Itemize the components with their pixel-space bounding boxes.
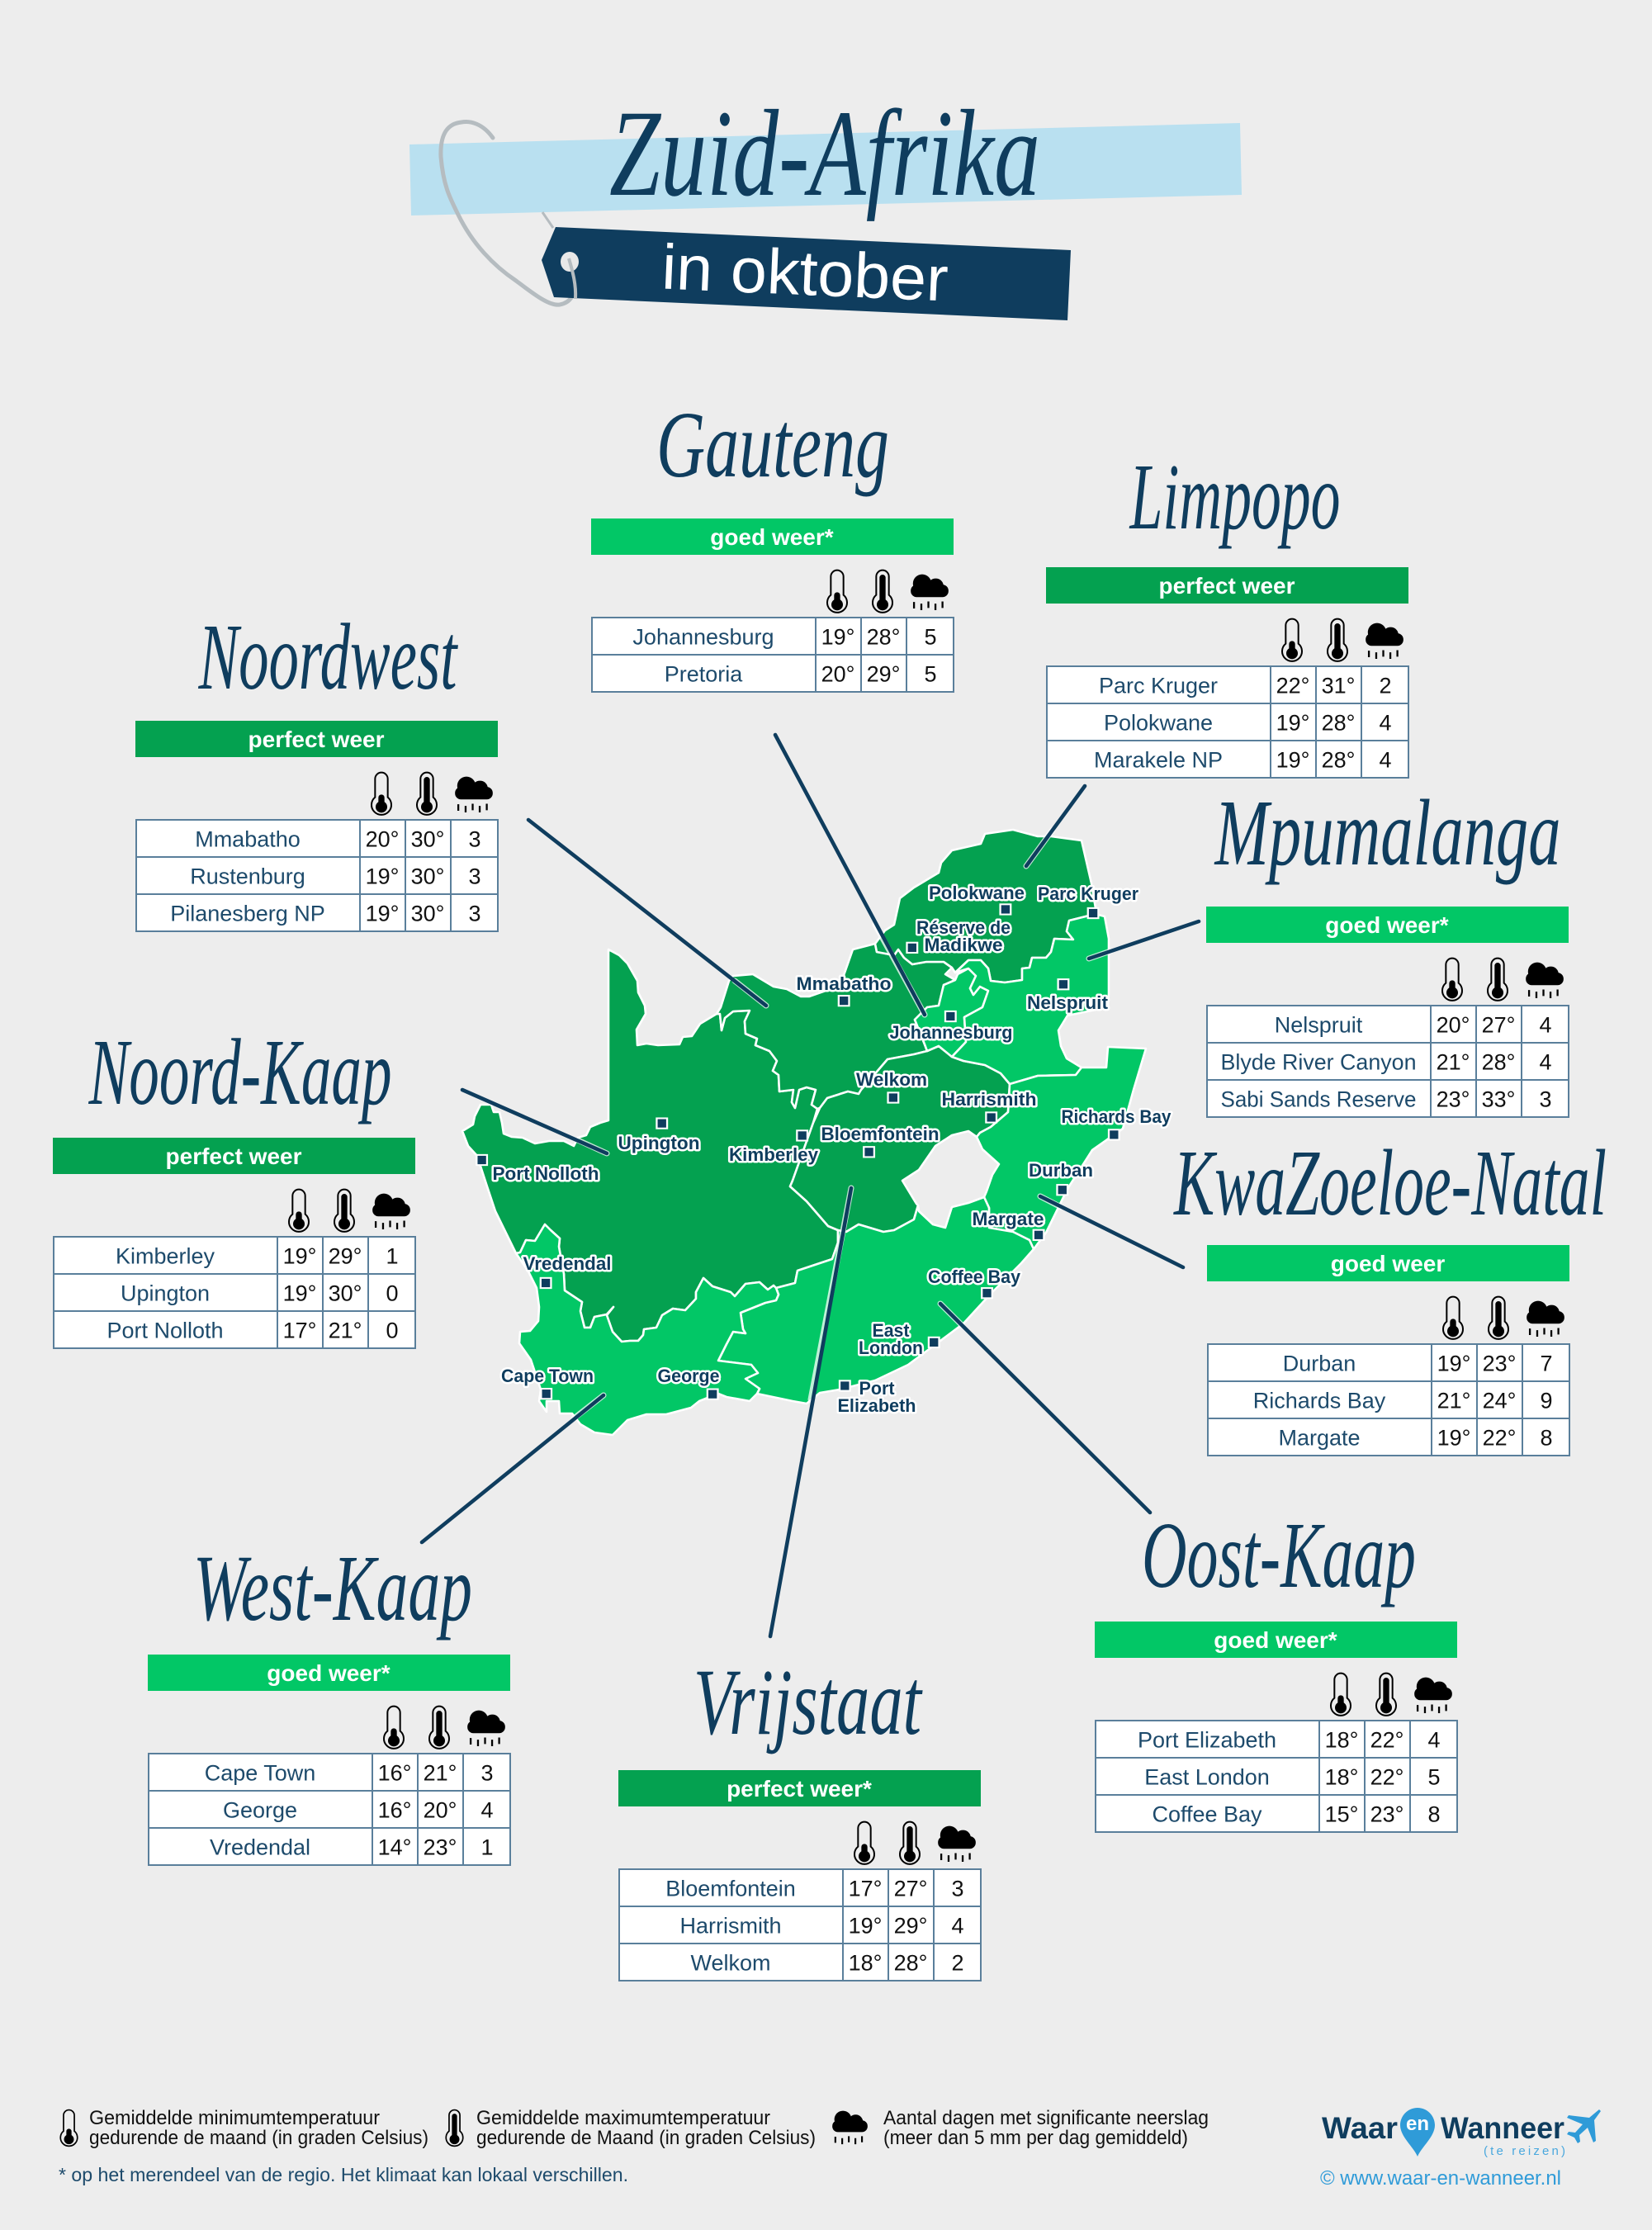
logo: Waar en Wanneer <box>1320 2108 1601 2190</box>
rating bar <box>135 721 498 757</box>
climate table: Johannesburg <box>632 624 774 649</box>
climate table: Richards Bay <box>1253 1389 1386 1413</box>
climate table: 3 <box>480 1760 494 1785</box>
logo word: en: en <box>1406 2113 1429 2135</box>
rating bar: goed weer* <box>267 1660 391 1686</box>
map labels: Welkom <box>856 1069 927 1090</box>
climate table: 33° <box>1482 1087 1515 1111</box>
rating bar <box>591 518 954 555</box>
map labels: Vredendal <box>523 1253 611 1274</box>
heading: Noord-Kaap: Noord-Kaap <box>88 1020 391 1124</box>
leader line: Limpopo <box>1026 786 1085 866</box>
climate table: 4 <box>951 1914 964 1939</box>
panel: Mpumalanga <box>1206 780 1569 1117</box>
climate table: 19° <box>1276 710 1309 735</box>
climate table: 29° <box>894 1914 927 1939</box>
climate table <box>1208 1344 1569 1456</box>
map labels <box>492 883 1172 1416</box>
logo tagline: (te reizen) <box>1484 2144 1565 2158</box>
climate table: 23° <box>1370 1802 1403 1826</box>
climate table: 20° <box>1437 1012 1470 1037</box>
map labels: Cape Town <box>501 1366 594 1386</box>
icon: minimum temperature <box>60 2110 78 2146</box>
heading: West-Kaap: West-Kaap <box>193 1536 472 1641</box>
logo word: Wanneer: Wanneer <box>1441 2111 1564 2145</box>
leader line: West-Kaap <box>422 1395 604 1542</box>
climate table: 5 <box>924 624 937 649</box>
climate table: Sabi Sands Reserve <box>1220 1087 1417 1111</box>
icons: temperature and rain <box>1282 619 1403 661</box>
legend text: maximum temperature: gedurende de Maand (in graden Celsius) <box>476 2127 816 2149</box>
climate table: Blyde River Canyon <box>1220 1050 1417 1075</box>
title block <box>409 85 1242 320</box>
rating bar: goed weer* <box>710 524 834 550</box>
climate table: 19° <box>366 902 399 926</box>
icons: temperature and rain <box>1443 1297 1564 1339</box>
heading: Vrijstaat: Vrijstaat <box>693 1650 923 1754</box>
province: Noord-Kaap <box>462 949 838 1342</box>
climate table: 31° <box>1322 674 1355 698</box>
rating bar <box>618 1770 981 1806</box>
map labels: Margate <box>973 1209 1044 1229</box>
climate table: 4 <box>1539 1012 1552 1037</box>
climate table: Harrismith <box>679 1914 782 1939</box>
map labels: Réserve de <box>916 917 1011 938</box>
legend text: rain: Aantal dagen met significante neerslag <box>883 2107 1209 2129</box>
icons: temperature and rain <box>289 1190 410 1232</box>
climate table: 5 <box>1427 1765 1441 1790</box>
tag string <box>441 122 575 305</box>
map labels: Harrismith <box>941 1089 1037 1110</box>
icons: temperature and rain <box>854 1822 976 1864</box>
climate table: 19° <box>283 1281 316 1306</box>
panel: Limpopo <box>1046 444 1408 778</box>
climate table: George <box>223 1798 297 1823</box>
climate table: 29° <box>329 1243 362 1268</box>
rating bar: perfect weer* <box>727 1776 872 1802</box>
climate table: 1 <box>480 1835 494 1859</box>
climate table: 4 <box>1427 1727 1441 1752</box>
rating bar <box>1206 907 1569 943</box>
climate table: 19° <box>821 624 854 649</box>
climate table: 28° <box>867 624 900 649</box>
climate table: 19° <box>1437 1351 1470 1375</box>
climate table: Port Elizabeth <box>1138 1727 1276 1752</box>
leader line: Vrijstaat <box>770 1188 851 1636</box>
map labels: Richards Bay <box>1062 1106 1172 1127</box>
climate table: 3 <box>468 827 481 852</box>
legend text: rain: (meer dan 5 mm per dag gemiddeld) <box>883 2127 1188 2149</box>
province: KwaZoeloe-Natal <box>977 1047 1146 1249</box>
leader line: Mpumalanga <box>1089 921 1199 959</box>
climate table: 23° <box>1483 1351 1516 1375</box>
climate table: 21° <box>424 1760 457 1785</box>
climate table: Welkom <box>690 1950 771 1975</box>
climate table: 27° <box>894 1876 927 1901</box>
climate table: 18° <box>849 1950 882 1975</box>
climate table: 0 <box>386 1318 399 1342</box>
title band <box>409 123 1242 215</box>
climate table: 24° <box>1483 1389 1516 1413</box>
logo url: © www.waar-en-wanneer.nl <box>1320 2167 1561 2190</box>
climate table: Port Nolloth <box>107 1318 224 1342</box>
logo pin <box>1400 2108 1435 2157</box>
climate table: 16° <box>378 1798 411 1823</box>
climate table <box>1047 666 1408 778</box>
panel: Vrijstaat <box>618 1650 981 1981</box>
climate table: 21° <box>329 1318 362 1342</box>
weather card: KwaZoeloe-Natal <box>1207 1245 1569 1456</box>
climate table: Coffee Bay <box>1152 1802 1262 1826</box>
icon: maximum temperature <box>446 2110 463 2146</box>
rating bar: goed weer* <box>1325 912 1449 938</box>
climate table: 27° <box>1482 1012 1515 1037</box>
province: Oost-Kaap <box>718 1197 1034 1404</box>
subtitle: in oktober <box>660 231 949 315</box>
climate table: 0 <box>386 1281 399 1306</box>
climate table: 20° <box>424 1798 457 1823</box>
climate table <box>1207 1006 1569 1117</box>
province: West-Kaap <box>516 1224 779 1435</box>
icons: temperature and rain <box>827 571 949 613</box>
climate table: Kimberley <box>116 1243 215 1268</box>
climate table: 8 <box>1540 1425 1553 1450</box>
climate table: 9 <box>1540 1389 1553 1413</box>
climate table: 17° <box>283 1318 316 1342</box>
climate table: Rustenburg <box>190 864 305 888</box>
climate table: 14° <box>378 1835 411 1859</box>
weather card: Noord-Kaap <box>53 1138 415 1348</box>
climate table: 19° <box>849 1914 882 1939</box>
map labels: Mmabatho <box>796 973 892 994</box>
rating bar <box>148 1655 510 1691</box>
heading: Limpopo: Limpopo <box>1129 444 1341 549</box>
climate table: 5 <box>924 662 937 687</box>
map labels: Madikwe <box>925 935 1002 955</box>
province: Gauteng <box>915 968 988 1057</box>
climate table: Cape Town <box>205 1760 315 1785</box>
map labels: Port <box>859 1378 895 1399</box>
climate table: 30° <box>329 1281 362 1306</box>
climate table: Nelspruit <box>1275 1012 1363 1037</box>
map labels: Coffee Bay <box>928 1267 1021 1287</box>
panel: Oost-Kaap <box>1095 1503 1457 1832</box>
climate table: Parc Kruger <box>1099 674 1218 698</box>
city markers <box>476 904 1119 1399</box>
icon: plane <box>1567 2109 1601 2143</box>
climate table <box>54 1237 415 1348</box>
panel: West-Kaap <box>148 1536 510 1865</box>
leader line: Noordwest <box>528 820 766 1006</box>
climate table: 23° <box>1437 1087 1470 1111</box>
climate table: Pilanesberg NP <box>170 902 325 926</box>
weather card: Noordwest <box>135 721 498 931</box>
rating bar <box>1046 567 1408 604</box>
climate table: Marakele NP <box>1094 748 1223 773</box>
climate table <box>136 820 498 931</box>
climate table: 20° <box>366 827 399 852</box>
climate table: 28° <box>1482 1050 1515 1075</box>
panel: Noordwest <box>135 604 498 931</box>
climate table: 19° <box>1437 1425 1470 1450</box>
map labels: Upington <box>618 1133 700 1153</box>
climate table: 28° <box>894 1950 927 1975</box>
climate table: Polokwane <box>1104 710 1213 735</box>
panel: Noord-Kaap <box>53 1020 415 1348</box>
map labels: Johannesburg <box>890 1022 1012 1043</box>
map labels: Durban <box>1029 1160 1093 1181</box>
map labels: Kimberley <box>729 1144 819 1165</box>
province: Vrijstaat <box>790 1046 1010 1232</box>
map labels: Polokwane <box>929 883 1025 903</box>
heading: Oost-Kaap: Oost-Kaap <box>1142 1503 1416 1607</box>
rating bar <box>1207 1245 1569 1281</box>
climate table <box>1096 1721 1457 1832</box>
string over tag <box>569 258 575 299</box>
climate table: 17° <box>849 1876 882 1901</box>
climate table: Upington <box>121 1281 210 1306</box>
climate table: 2 <box>951 1950 964 1975</box>
climate table: Vredendal <box>210 1835 310 1859</box>
climate table: 20° <box>821 662 854 687</box>
rating bar <box>1095 1622 1457 1658</box>
climate table <box>619 1869 981 1981</box>
leader line: Noord-Kaap <box>462 1090 607 1153</box>
climate table: 28° <box>1322 748 1355 773</box>
climate table: 1 <box>386 1243 399 1268</box>
climate table: 23° <box>424 1835 457 1859</box>
icon: rain <box>832 2111 868 2144</box>
legend text: minimum temperature: Gemiddelde minimumtemperatuur <box>89 2107 380 2129</box>
leader line: Oost-Kaap <box>940 1304 1150 1513</box>
tag hole <box>561 252 579 272</box>
footnote: * op het merendeel van de regio. Het klimaat kan lokaal verschillen. <box>59 2164 628 2185</box>
climate table: Pretoria <box>665 662 743 687</box>
map labels: Parc Kruger <box>1038 883 1138 904</box>
rating bar: perfect weer <box>249 727 385 752</box>
leader line: Gauteng <box>775 735 925 1015</box>
panel: Gauteng <box>591 392 954 692</box>
province: Mpumalanga <box>952 914 1109 1084</box>
heading: Gauteng: Gauteng <box>656 392 889 497</box>
map of South Africa <box>462 830 1146 1435</box>
climate table: 3 <box>468 902 481 926</box>
main title: Zuid-Afrika <box>609 85 1040 222</box>
climate table: 19° <box>283 1243 316 1268</box>
icons: temperature and rain <box>384 1707 505 1749</box>
climate table: Durban <box>1283 1351 1356 1375</box>
climate table: 2 <box>1379 674 1392 698</box>
icons: temperature and rain <box>372 773 493 815</box>
climate table: 21° <box>1437 1389 1470 1413</box>
climate table: 4 <box>1539 1050 1552 1075</box>
leader lines <box>422 735 1199 1636</box>
rating bar <box>53 1138 415 1174</box>
climate table: 3 <box>1539 1087 1552 1111</box>
climate table: 30° <box>411 827 444 852</box>
rating bar: perfect weer <box>1159 573 1295 599</box>
climate table: 18° <box>1325 1765 1358 1790</box>
subtitle tag <box>542 227 1071 320</box>
climate table: 29° <box>867 662 900 687</box>
weather card: Limpopo <box>1046 567 1408 778</box>
legend text: minimum temperature: gedurende de maand (in graden Celsius) <box>89 2127 428 2149</box>
icons: temperature and rain <box>1442 959 1564 1001</box>
climate table: 16° <box>378 1760 411 1785</box>
climate table: Bloemfontein <box>665 1876 796 1901</box>
climate table: 22° <box>1276 674 1309 698</box>
panel: KwaZoeloe-Natal <box>1173 1130 1607 1456</box>
climate table: 28° <box>1322 710 1355 735</box>
climate table: 4 <box>480 1798 494 1823</box>
map labels: George <box>657 1366 720 1386</box>
climate table: 22° <box>1483 1425 1516 1450</box>
climate table: 3 <box>951 1876 964 1901</box>
weather card: Vrijstaat <box>618 1770 981 1981</box>
climate table: 19° <box>366 864 399 888</box>
legend <box>59 2107 1209 2185</box>
climate table: 4 <box>1379 710 1392 735</box>
province: Limpopo <box>875 830 1096 982</box>
heading: Noordwest: Noordwest <box>198 604 458 709</box>
climate table: 8 <box>1427 1802 1441 1826</box>
rating bar: goed weer* <box>1214 1627 1337 1653</box>
climate table: 3 <box>468 864 481 888</box>
climate table: 15° <box>1325 1802 1358 1826</box>
climate table <box>592 618 954 692</box>
leader line: KwaZoeloe-Natal <box>1040 1196 1183 1267</box>
rating bar: perfect weer <box>166 1143 302 1169</box>
map labels: Port Nolloth <box>492 1163 599 1184</box>
weather card: West-Kaap <box>148 1655 510 1865</box>
climate table: East London <box>1144 1765 1270 1790</box>
weather card: Gauteng <box>591 518 954 692</box>
rating bar: goed weer <box>1331 1251 1445 1276</box>
climate table: Mmabatho <box>195 827 301 852</box>
map labels: London <box>859 1338 923 1358</box>
climate table: 4 <box>1379 748 1392 773</box>
map labels: Elizabeth <box>837 1395 916 1416</box>
map labels: Nelspruit <box>1027 992 1109 1013</box>
weather card: Oost-Kaap <box>1095 1622 1457 1832</box>
icons: temperature and rain <box>1331 1674 1452 1716</box>
climate table: 30° <box>411 864 444 888</box>
climate table: Margate <box>1278 1425 1361 1450</box>
climate table: 22° <box>1370 1765 1403 1790</box>
map labels: East <box>872 1320 910 1341</box>
weather card: Mpumalanga <box>1206 907 1569 1117</box>
climate table <box>149 1754 510 1865</box>
climate table: 19° <box>1276 748 1309 773</box>
climate table: 18° <box>1325 1727 1358 1752</box>
province: Noordwest <box>717 944 955 1109</box>
tag string upper segment <box>542 212 553 228</box>
map labels: Bloemfontein <box>821 1124 940 1144</box>
logo word: Waar: Waar <box>1322 2111 1398 2145</box>
legend text: maximum temperature: Gemiddelde maximumtemperatuur <box>476 2107 770 2129</box>
climate table: 30° <box>411 902 444 926</box>
climate table: 22° <box>1370 1727 1403 1752</box>
climate table: 21° <box>1437 1050 1470 1075</box>
climate table: 7 <box>1540 1351 1553 1375</box>
